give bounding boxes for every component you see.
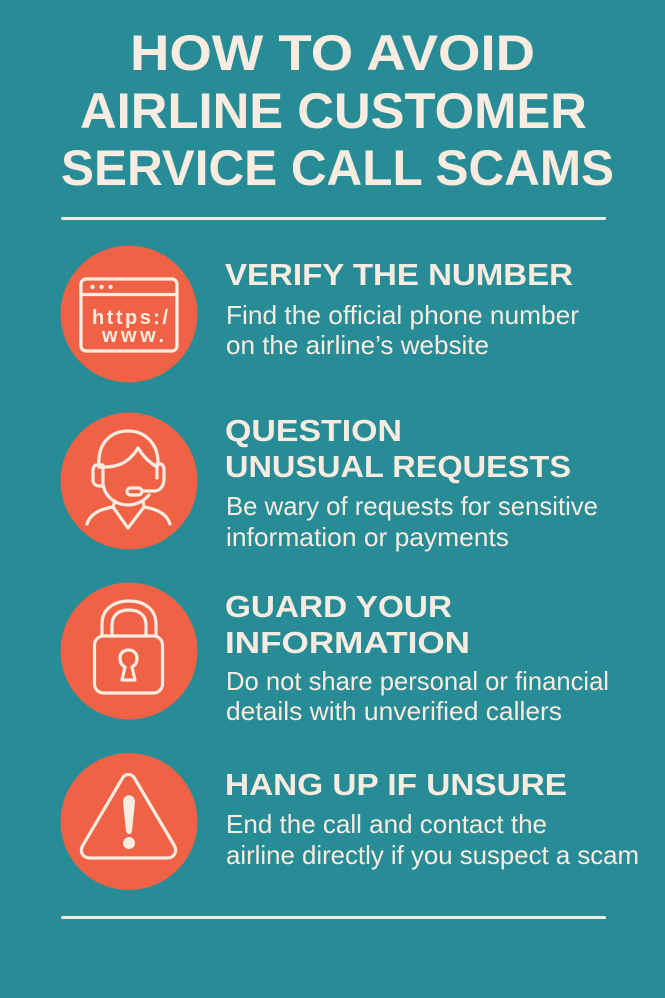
icon: browser window: www. [101,325,164,347]
title: HOW TO AVOID [130,25,535,81]
heading: GUARD YOUR [225,589,452,624]
icon: customer service agent [60,412,198,550]
icon: padlock [60,582,198,720]
heading: QUESTION [225,413,402,448]
text block: Do not share personal or financial [226,666,609,696]
text block [226,666,609,726]
text block [226,809,639,870]
title: SERVICE CALL SCAMS [61,140,614,196]
panel: question unusual requests [60,412,598,552]
text block: on the airline’s website [226,330,489,360]
title: AIRLINE CUSTOMER [80,83,587,139]
icon: warning triangle [60,753,198,890]
text block: information or payments [226,522,509,552]
text block [226,300,579,360]
heading: UNUSUAL REQUESTS [225,449,571,484]
heading [225,589,470,660]
text block [226,491,598,552]
heading: INFORMATION [225,625,470,660]
panel: hang up if unsure [60,753,639,890]
panel: verify the number [60,246,579,382]
text block: End the call and contact the [226,809,547,839]
icon: browser window [60,246,198,382]
icon: browser window: https:/ [92,307,168,329]
heading: HANG UP IF UNSURE [225,767,567,802]
text block: Find the official phone number [226,300,579,330]
title [61,25,614,196]
panel: guard your information [60,582,609,726]
text block: Be wary of requests for sensitive [226,491,598,521]
text block: details with unverified callers [226,696,562,726]
heading [225,413,571,484]
heading: VERIFY THE NUMBER [225,257,573,292]
text block: airline directly if you suspect a scam [226,840,639,870]
